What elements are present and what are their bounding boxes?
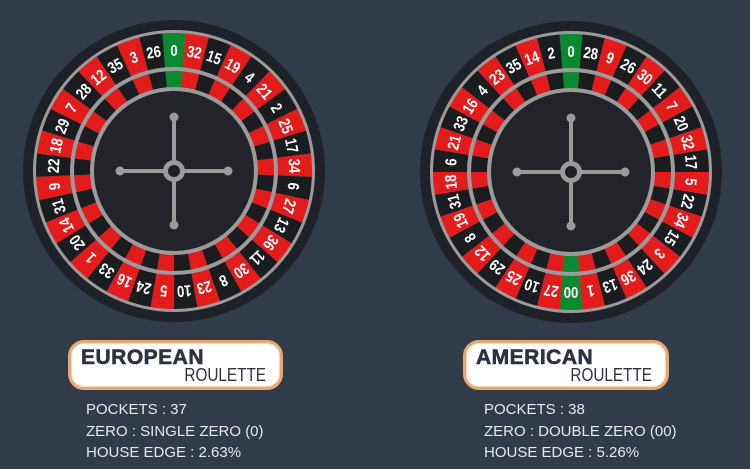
wheel: european: 2	[266, 101, 285, 116]
wheel: european: 15	[204, 48, 224, 69]
wheel: american: 32	[676, 133, 697, 152]
wheel: european: 21	[252, 81, 275, 103]
stats: american	[484, 401, 677, 461]
wheel: european: 26	[145, 43, 162, 63]
wheel: american: 13	[600, 274, 620, 296]
wheel: american: 23	[487, 66, 509, 89]
wheel: american: 24	[633, 255, 655, 278]
wheel: american	[420, 21, 722, 323]
wheel: european: 31	[49, 196, 70, 216]
wheel: european: 8	[216, 270, 230, 289]
wheel: american: 1	[586, 281, 596, 299]
wheel: american: 0	[567, 44, 575, 61]
stats: american: POCKETS : 38	[484, 401, 585, 418]
wheel: american: 30	[633, 66, 655, 89]
wheel: european: 28	[73, 81, 96, 103]
stats: european: HOUSE EDGE : 2.63%	[86, 444, 241, 461]
wheel: american: 31	[445, 192, 466, 211]
wheel: american: 35	[504, 56, 525, 78]
wheel: american: 18	[443, 174, 461, 190]
wheel: european	[23, 20, 325, 322]
wheel: european: 19	[222, 56, 243, 78]
wheel: european: 24	[134, 276, 153, 297]
wheel: european: 34	[284, 158, 302, 174]
label: european roulette	[68, 340, 283, 390]
wheel: european: 6	[283, 181, 302, 191]
wheel: american: 11	[648, 80, 670, 102]
wheel: european: 22	[46, 158, 64, 174]
wheel: european: 16	[115, 269, 135, 291]
wheel: american: 21	[445, 133, 466, 152]
label: american roulette: AMERICAN	[476, 346, 593, 369]
wheel: european: 32	[186, 43, 203, 63]
wheel: european: 9	[46, 181, 65, 191]
label: american roulette	[463, 340, 669, 390]
stats: american: HOUSE EDGE : 5.26%	[484, 444, 639, 461]
wheel: american: 4	[474, 82, 493, 100]
wheel: european: 23	[195, 276, 213, 297]
wheel: european: 7	[63, 101, 82, 116]
wheel: american: 8	[462, 229, 480, 245]
wheel: american: 26	[617, 56, 638, 78]
wheel: american: 3	[650, 244, 668, 261]
wheel: american: 2	[546, 45, 556, 63]
wheel: american: 27	[543, 280, 560, 300]
wheel: american: 14	[522, 48, 543, 70]
wheel: european: 33	[96, 259, 118, 281]
wheel: european: 1	[83, 248, 100, 266]
wheel: european: 3	[128, 49, 141, 68]
stats: european	[86, 401, 264, 461]
wheel: american: 20	[669, 114, 691, 134]
wheel: american: 36	[617, 266, 638, 288]
wheel: american: 7	[662, 99, 680, 115]
wheel: american: 9	[603, 50, 616, 69]
wheel: american: 12	[472, 242, 495, 264]
wheel: european: 25	[274, 116, 296, 137]
wheel: european: 35	[105, 56, 126, 78]
wheel: european: 29	[52, 116, 74, 137]
label: american roulette: ROULETTE	[570, 365, 652, 385]
wheel: american: 15	[660, 226, 682, 248]
stats: american: ZERO : DOUBLE ZERO (00)	[484, 422, 677, 440]
wheel: american: 10	[522, 274, 542, 296]
wheel: european: 14	[56, 214, 79, 235]
wheel: american: 28	[582, 44, 599, 64]
wheel: american: 33	[451, 114, 473, 134]
wheel: european: 13	[269, 214, 292, 235]
wheel: european: 0	[170, 43, 178, 60]
wheel: american: 17	[681, 154, 699, 170]
wheel: european: 30	[230, 259, 252, 281]
wheel: european: 18	[47, 137, 67, 155]
label: european roulette: ROULETTE	[184, 365, 266, 385]
stats: european: ZERO : SINGLE ZERO (0)	[86, 422, 264, 440]
wheel: american: 29	[487, 255, 509, 278]
wheel: american: 6	[443, 158, 461, 166]
wheel: european: 4	[241, 69, 258, 88]
wheel: american: 00	[564, 283, 578, 300]
wheel: american: 34	[669, 210, 691, 231]
wheel: european: 11	[246, 246, 268, 268]
wheel: european: 12	[88, 67, 110, 90]
wheel: european: 5	[160, 281, 168, 299]
wheel: european: 10	[176, 281, 192, 299]
wheel: european: 27	[278, 196, 299, 216]
wheel: american: 16	[460, 96, 482, 118]
wheel: european: 36	[259, 231, 281, 253]
wheel: american: 25	[504, 266, 525, 288]
wheel: european: 20	[67, 231, 89, 253]
label: european roulette: EUROPEAN	[81, 346, 204, 369]
wheel: american: 22	[676, 192, 697, 211]
wheel: american: 5	[681, 178, 699, 186]
stats: european: POCKETS : 37	[86, 401, 187, 418]
wheel: american: 19	[451, 210, 473, 230]
wheel: european: 17	[281, 137, 301, 155]
